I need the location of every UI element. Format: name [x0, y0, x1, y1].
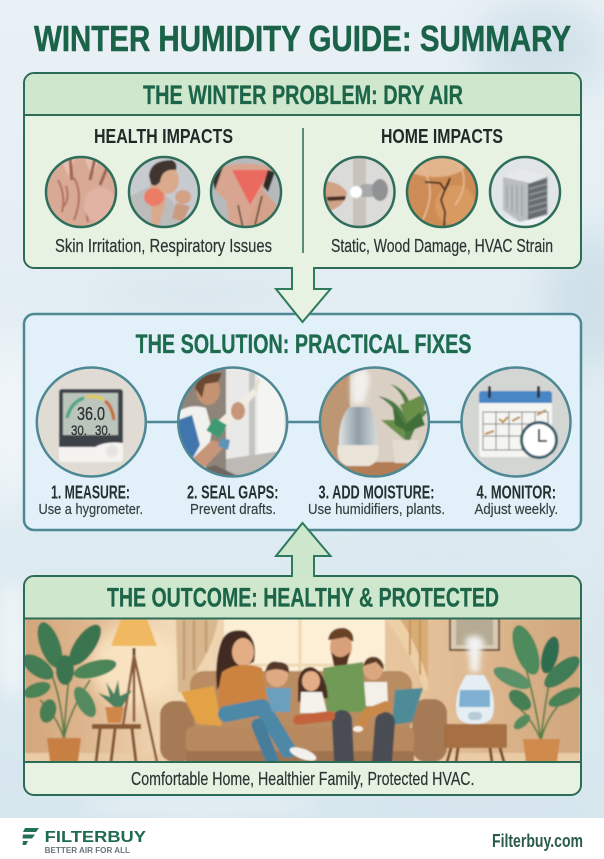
- logo wordmark: FILTERBUY: [45, 829, 146, 846]
- footer bar: [0, 818, 604, 859]
- panel header: problem: THE WINTER PROBLEM: DRY AIR: [143, 80, 463, 110]
- panel header: problem: [24, 74, 581, 115]
- floor lamp: [111, 619, 157, 762]
- humidifier: [456, 635, 494, 724]
- icon: irritated skin: [46, 157, 116, 227]
- heading: home impacts: HOME IMPACTS: [381, 126, 503, 148]
- girl in white shirt: [298, 667, 330, 720]
- step 1 text: 1. MEASURE:: [51, 482, 130, 502]
- icon: cracked wood: [405, 153, 477, 228]
- step 3 image: humidifier and plant: [320, 367, 430, 477]
- right table: [444, 724, 507, 762]
- logo icon: [22, 828, 39, 845]
- step 4 image: calendar and clock: [461, 367, 571, 477]
- step 2 text: Prevent drafts.: [190, 501, 276, 518]
- step 1 text: [38, 482, 143, 518]
- step 4 text: [474, 482, 558, 518]
- caption: health impacts: Skin Irritation, Respiratory Issues: [55, 236, 272, 256]
- step 2 text: 2. SEAL GAPS:: [187, 482, 278, 502]
- hygrometer readings: 30.: [95, 422, 111, 438]
- icon: static shock at door knob: [324, 157, 395, 227]
- arrow: problem to solution: [276, 267, 330, 322]
- step 1 text: Use a hygrometer.: [38, 501, 143, 518]
- sofa: [160, 671, 447, 762]
- panel: the winter problem: [24, 73, 581, 268]
- left plant: [18, 619, 118, 738]
- hygrometer readings: 30.: [71, 422, 87, 438]
- step 4 text: 4. MONITOR:: [476, 482, 556, 502]
- step 2 image: sealing window gaps: [178, 367, 291, 477]
- picture frame: [450, 612, 499, 650]
- step 2 text: [187, 482, 278, 518]
- caption: outcome: Comfortable Home, Healthier Family, Protected HVAC.: [131, 769, 474, 789]
- arrow: outcome to solution: [276, 523, 330, 577]
- panel header: outcome: [25, 577, 580, 618]
- hygrometer readings: 36.0: [77, 404, 105, 424]
- right plant: [490, 622, 585, 762]
- step 3 text: Use humidifiers, plants.: [308, 501, 445, 518]
- icon: sore throat: [211, 157, 281, 228]
- lamp glow: [90, 625, 180, 705]
- icon: coughing man: [129, 157, 199, 228]
- step 1 image: hygrometer: [36, 367, 148, 477]
- curtains: [176, 619, 428, 692]
- hygrometer readings: [71, 406, 110, 436]
- mother: [216, 630, 318, 763]
- logo tagline: BETTER AIR FOR ALL: [45, 846, 130, 855]
- side table with plant: [92, 680, 141, 762]
- father: [323, 628, 385, 762]
- toddler on lap: [353, 657, 388, 732]
- step 3 text: [308, 482, 445, 518]
- window: [224, 620, 386, 672]
- heading: health impacts: HEALTH IMPACTS: [94, 126, 233, 148]
- heading: the solution: THE SOLUTION: PRACTICAL FIXES: [136, 329, 472, 359]
- left pot: [47, 738, 81, 762]
- boy in blue shirt: [265, 661, 291, 712]
- panel: the solution: [24, 314, 581, 530]
- illustration: family in living room: [18, 612, 585, 763]
- icon: snowy HVAC unit: [490, 157, 560, 228]
- panel: the outcome: [18, 576, 585, 795]
- step 3 text: 3. ADD MOISTURE:: [318, 482, 434, 502]
- step 4 text: Adjust weekly.: [474, 501, 558, 518]
